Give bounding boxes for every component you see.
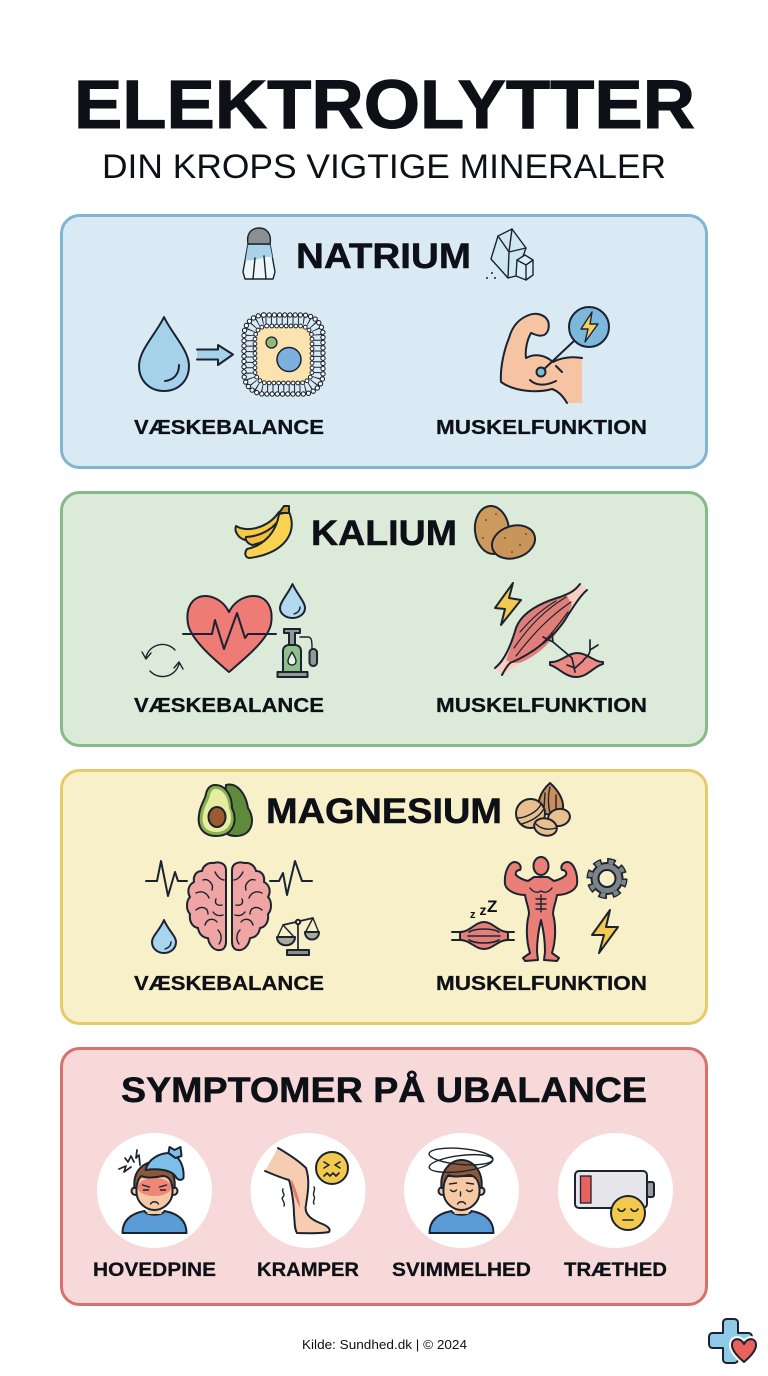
- icon: leg: [265, 1148, 330, 1233]
- icon: balance scale: [277, 918, 319, 955]
- icon: water drop: [152, 920, 176, 953]
- panel: symptoms: [62, 1048, 706, 1304]
- heading: natrium: NATRIUM: [296, 237, 471, 276]
- heading: kalium: KALIUM: [311, 514, 457, 553]
- label: VÆSKEBALANCE: [134, 972, 324, 995]
- icon: heart with pulse: [183, 596, 276, 672]
- label: VÆSKEBALANCE: [134, 694, 324, 717]
- icon: lightning bolt: [592, 910, 618, 953]
- icon: bananas: [235, 506, 292, 558]
- icon: muscle and nerve: [495, 584, 603, 677]
- icon: pain bolts: [119, 1150, 140, 1172]
- panel: kalium: [62, 492, 706, 746]
- icon: cycle arrows: [142, 644, 183, 677]
- symptom: dizziness: [404, 1133, 519, 1248]
- icon: arrow: [197, 345, 233, 365]
- symptom: fatigue: [558, 1133, 673, 1248]
- text: sleep zzz: Z: [487, 897, 497, 916]
- label: TRÆTHED: [564, 1259, 667, 1281]
- icon: pump bottle: [278, 629, 317, 677]
- text: sleep zzz: [470, 897, 497, 921]
- heading: magnesium: MAGNESIUM: [266, 792, 502, 831]
- text: sleep zzz: z: [480, 902, 486, 918]
- icon: person with ice bag: [122, 1147, 186, 1233]
- panel: magnesium: [62, 770, 706, 1024]
- icon: tired face: [611, 1196, 645, 1230]
- icon: salt shaker: [243, 228, 275, 279]
- icon: muscular figure: [505, 857, 577, 961]
- icon: potatoes: [473, 504, 539, 564]
- icon: relaxed muscle: [452, 922, 514, 949]
- icon: pulse right: [270, 861, 312, 895]
- icon: avocado: [199, 785, 252, 836]
- icon: pain face: [316, 1152, 348, 1184]
- icon: pulse left: [146, 861, 187, 896]
- icon: salt crystals: [486, 229, 533, 280]
- footer source: Kilde: Sundhed.dk | © 2024: [302, 1338, 467, 1352]
- icon: cell with membrane: [244, 315, 323, 394]
- label: VÆSKEBALANCE: [134, 416, 324, 439]
- icon: gear: [590, 862, 624, 896]
- text: sleep zzz: z: [470, 909, 476, 921]
- label: MUSKELFUNKTION: [436, 416, 647, 439]
- icon: person: [430, 1160, 494, 1233]
- label: KRAMPER: [257, 1259, 359, 1281]
- icon: water drop: [139, 317, 189, 391]
- panel: natrium: [62, 216, 706, 468]
- icon: water drop: [280, 584, 305, 618]
- label: HOVEDPINE: [93, 1259, 216, 1281]
- heading: symptoms: SYMPTOMER PÅ UBALANCE: [121, 1070, 647, 1110]
- icon: flexed arm with lightning: [501, 307, 609, 403]
- icon: low battery: [575, 1171, 654, 1208]
- icon: lightning bolt: [495, 583, 521, 625]
- icon: nuts: [516, 783, 572, 838]
- label: MUSKELFUNKTION: [436, 972, 647, 995]
- icon: brain: [187, 862, 271, 950]
- label: MUSKELFUNKTION: [436, 694, 647, 717]
- title: ELEKTROLYTTER: [74, 66, 695, 143]
- icon: dizzy rings: [428, 1146, 494, 1175]
- subtitle: DIN KROPS VIGTIGE MINERALER: [102, 148, 666, 186]
- logo: cross and heart: [709, 1319, 756, 1363]
- symptom: headache: [97, 1133, 212, 1248]
- label: SVIMMELHED: [392, 1259, 531, 1281]
- symptom: cramps: [250, 1133, 366, 1248]
